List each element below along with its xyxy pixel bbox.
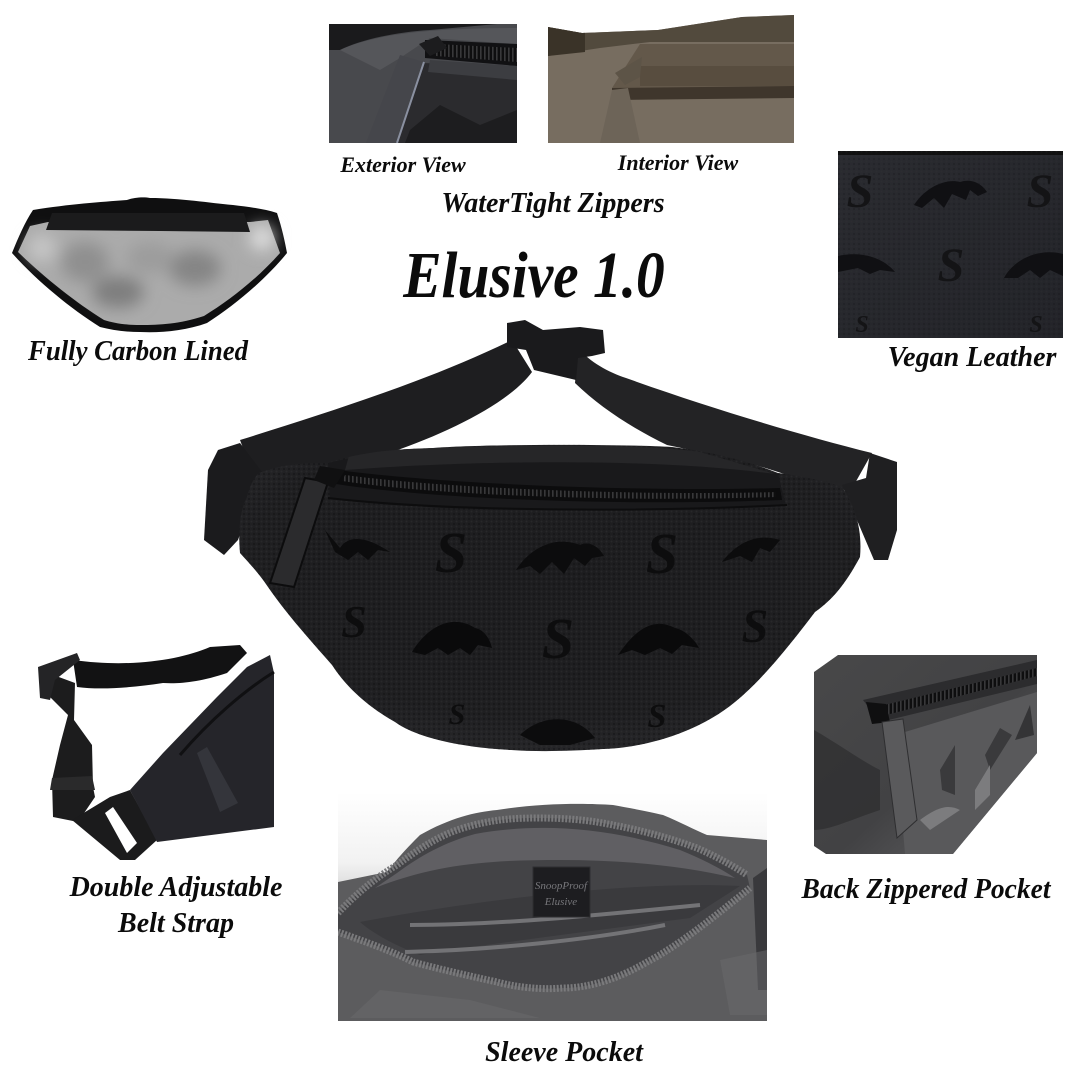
monogram pattern <box>325 520 780 745</box>
label: exterior view: Exterior View <box>339 152 466 177</box>
photo: vegan leather: S <box>938 239 964 292</box>
icon: right strap adjuster <box>842 453 897 560</box>
main product: belt strap <box>204 320 897 560</box>
icon: zipper pull <box>270 478 328 587</box>
photo: sleeve pocket: Elusive <box>544 896 577 908</box>
photo: vegan leather: S <box>855 312 869 338</box>
label: back zippered pocket: Back Zippered Pocket <box>801 874 1052 905</box>
label: vegan leather: Vegan Leather <box>888 342 1057 373</box>
main product: bag body <box>230 440 870 760</box>
label: sleeve pocket: Sleeve Pocket <box>485 1037 644 1068</box>
monogram pattern: S <box>742 600 768 653</box>
photo: exterior zipper view <box>329 24 517 143</box>
photo: back zippered pocket <box>814 655 1037 854</box>
monogram pattern: S <box>435 520 467 585</box>
icon: buckle <box>507 320 605 380</box>
label: watertight zippers: WaterTight Zippers <box>441 188 665 219</box>
photo: vegan leather <box>838 151 1063 338</box>
photo: interior zipper view <box>548 15 794 143</box>
icon: left strap adjuster <box>204 443 262 555</box>
monogram pattern: S <box>542 606 574 671</box>
title: Elusive 1.0 <box>402 239 665 312</box>
photo: carbon lining <box>12 197 287 332</box>
photo: vegan leather: S <box>1027 165 1053 218</box>
label: double adjustable belt strap: Double Adjustable <box>69 872 282 903</box>
label: interior view: Interior View <box>617 150 739 175</box>
label: fully carbon lined: Fully Carbon Lined <box>27 336 249 367</box>
photo: vegan leather: S <box>847 165 873 218</box>
monogram pattern: S <box>646 521 678 586</box>
monogram pattern: S <box>449 698 465 731</box>
photo: double adjustable strap <box>38 645 274 860</box>
monogram pattern: S <box>341 596 367 647</box>
monogram pattern: S <box>648 698 666 735</box>
photo: sleeve pocket <box>338 792 767 1021</box>
label: double adjustable belt strap <box>69 872 282 939</box>
photo: sleeve pocket: SnoopProof <box>535 880 589 892</box>
photo: vegan leather: S <box>1029 312 1043 338</box>
label: double adjustable belt strap: Belt Strap <box>117 908 234 939</box>
